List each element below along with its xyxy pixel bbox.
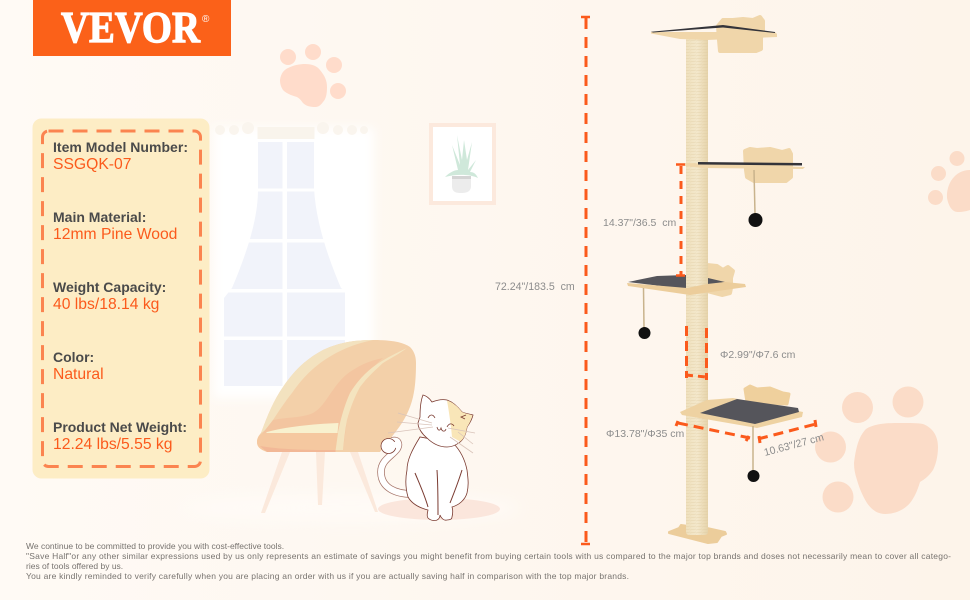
base plate bbox=[669, 525, 726, 543]
logo: VEVOR: ® bbox=[202, 14, 210, 25]
spec: main material: Main Material: bbox=[53, 209, 146, 225]
icon: right paw print bbox=[928, 151, 970, 212]
spec: main material: 12mm Pine Wood bbox=[53, 226, 177, 243]
disclaimer text: You are kindly reminded to verify carefully when you are placing an order with us if you are actually saving half in comparison with the top major brands. bbox=[26, 571, 629, 581]
top shelf bbox=[651, 25, 777, 40]
framed plant picture bbox=[429, 123, 496, 205]
label: total height: 72.24"/183.5 cm bbox=[495, 281, 575, 293]
third shelf bbox=[627, 275, 746, 295]
spec: weight capacity: 40 lbs/18.14 kg bbox=[53, 296, 159, 313]
sisal post bbox=[686, 35, 708, 535]
panel: product specifications bbox=[32, 118, 210, 478]
spec: item model number bbox=[53, 139, 188, 173]
cat tree product bbox=[627, 17, 805, 543]
spec: color: Natural bbox=[53, 366, 104, 383]
fourth shelf bbox=[680, 386, 803, 428]
disclaimer text: ries of tools offered by us. bbox=[26, 561, 123, 571]
spec: main material bbox=[53, 209, 177, 243]
cat shadow bbox=[378, 498, 500, 520]
spec: product net weight: 12.24 lbs/5.55 kg bbox=[53, 436, 172, 453]
second shelf bbox=[685, 162, 805, 169]
hanging ball toy bottom bbox=[748, 426, 760, 482]
third shelf back plate bbox=[707, 265, 733, 295]
window and curtains bbox=[214, 122, 374, 398]
label: shelf width: Φ13.78"/Φ35 cm bbox=[606, 428, 685, 440]
top shelf back plate bbox=[718, 17, 763, 51]
hanging ball toy middle bbox=[638, 288, 650, 339]
dimension: shelf spacing bbox=[676, 164, 685, 276]
floor highlight bbox=[180, 494, 520, 522]
spec: color bbox=[53, 349, 104, 383]
icon: top paw print bbox=[280, 44, 346, 107]
logo: VEVOR bbox=[33, 0, 231, 56]
label: post diameter: Φ2.99"/Φ7.6 cm bbox=[720, 349, 796, 361]
hanging ball toy top bbox=[748, 170, 762, 227]
armchair bbox=[257, 340, 416, 513]
spec: item model number: SSGQK-07 bbox=[53, 156, 131, 173]
dimension: shelf width bbox=[676, 421, 750, 441]
spec: color: Color: bbox=[53, 349, 94, 365]
spec: product net weight: Product Net Weight: bbox=[53, 419, 187, 435]
spec: item model number: Item Model Number: bbox=[53, 139, 188, 155]
spec: product net weight bbox=[53, 419, 187, 453]
spec: weight capacity bbox=[53, 279, 166, 313]
second shelf back plate bbox=[745, 149, 791, 181]
dimension: total height bbox=[581, 17, 590, 544]
label: shelf depth: 10.63"/27 cm bbox=[763, 431, 825, 459]
spec: weight capacity: Weight Capacity: bbox=[53, 279, 166, 295]
logo: VEVOR: VEVOR bbox=[61, 3, 201, 52]
icon: large paw print bbox=[815, 386, 938, 514]
disclaimer text: We continue to be committed to provide you with cost-effective tools. bbox=[26, 541, 284, 551]
disclaimer text: "Save Half"or any other similar expressions used by us only represents an estimate of savings you might benefit from buying certain tools with us compared to the major top brands and doses not necessarily mean to cover all catego- bbox=[26, 551, 951, 561]
cat illustration bbox=[381, 395, 475, 521]
dimension: post diameter bbox=[686, 326, 706, 380]
label: shelf spacing: 14.37"/36.5 cm bbox=[603, 217, 676, 229]
dimension: shelf depth bbox=[758, 420, 816, 443]
disclaimer text bbox=[26, 541, 951, 581]
